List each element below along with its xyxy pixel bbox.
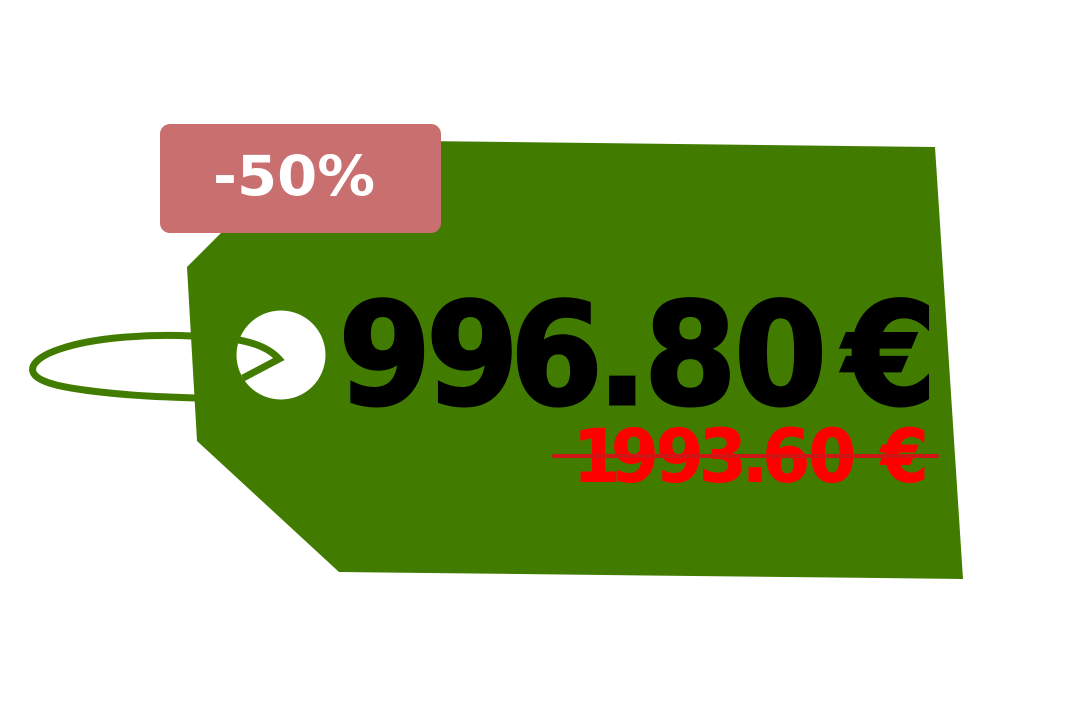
badge text: -50% [213,144,375,208]
current price: 996.80€ [338,273,937,438]
strikethrough line [552,454,939,458]
badge background [160,124,441,233]
old price [552,413,939,499]
tag string back loop [33,335,196,398]
old price text: 1993.60 € [573,413,929,499]
tag body [187,141,963,579]
price tag [33,141,963,579]
tag string through hole [232,339,279,378]
discount badge [160,124,441,233]
